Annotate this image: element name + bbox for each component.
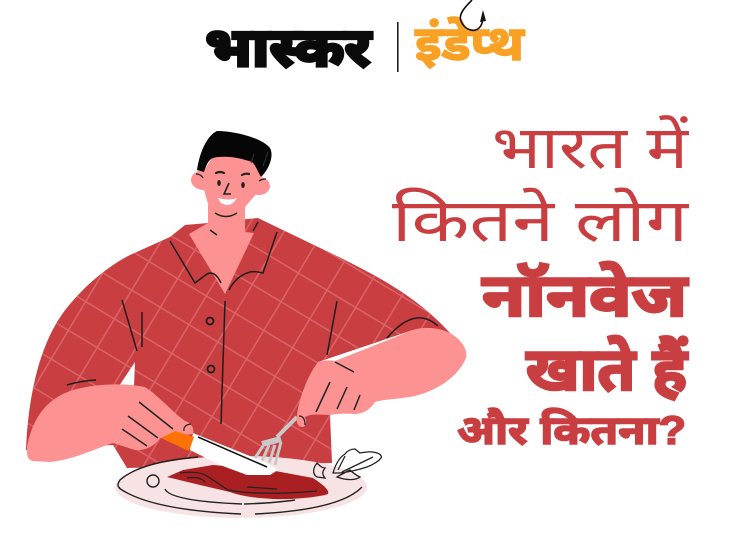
nose — [224, 183, 231, 194]
title — [392, 115, 690, 453]
head — [191, 131, 272, 216]
mouth — [218, 198, 237, 205]
shirt line details — [67, 222, 438, 424]
fork — [255, 417, 297, 465]
title line 3: नॉनवेज — [482, 262, 689, 329]
plate — [115, 456, 367, 518]
title line 5: और कितना? — [457, 408, 686, 453]
right arm — [297, 328, 466, 427]
title line 1: भारत में — [492, 115, 690, 181]
title line 4: खाते हैं — [526, 336, 688, 403]
left arm — [27, 384, 193, 462]
neck and chest — [189, 205, 254, 294]
title line 2: कितने लोग — [392, 187, 690, 254]
logo divider — [397, 22, 399, 72]
eyes and brows — [216, 172, 249, 175]
logo: indepth — [415, 0, 525, 71]
knife handle — [161, 431, 194, 451]
illustration: man eating — [26, 131, 466, 518]
meat — [167, 465, 328, 499]
leaves — [314, 449, 381, 480]
logo: indepth: इंडेप्थ — [415, 16, 525, 71]
knife — [190, 433, 278, 475]
logo: bhaskar: भास्कर — [205, 18, 372, 78]
shirt — [26, 218, 450, 468]
